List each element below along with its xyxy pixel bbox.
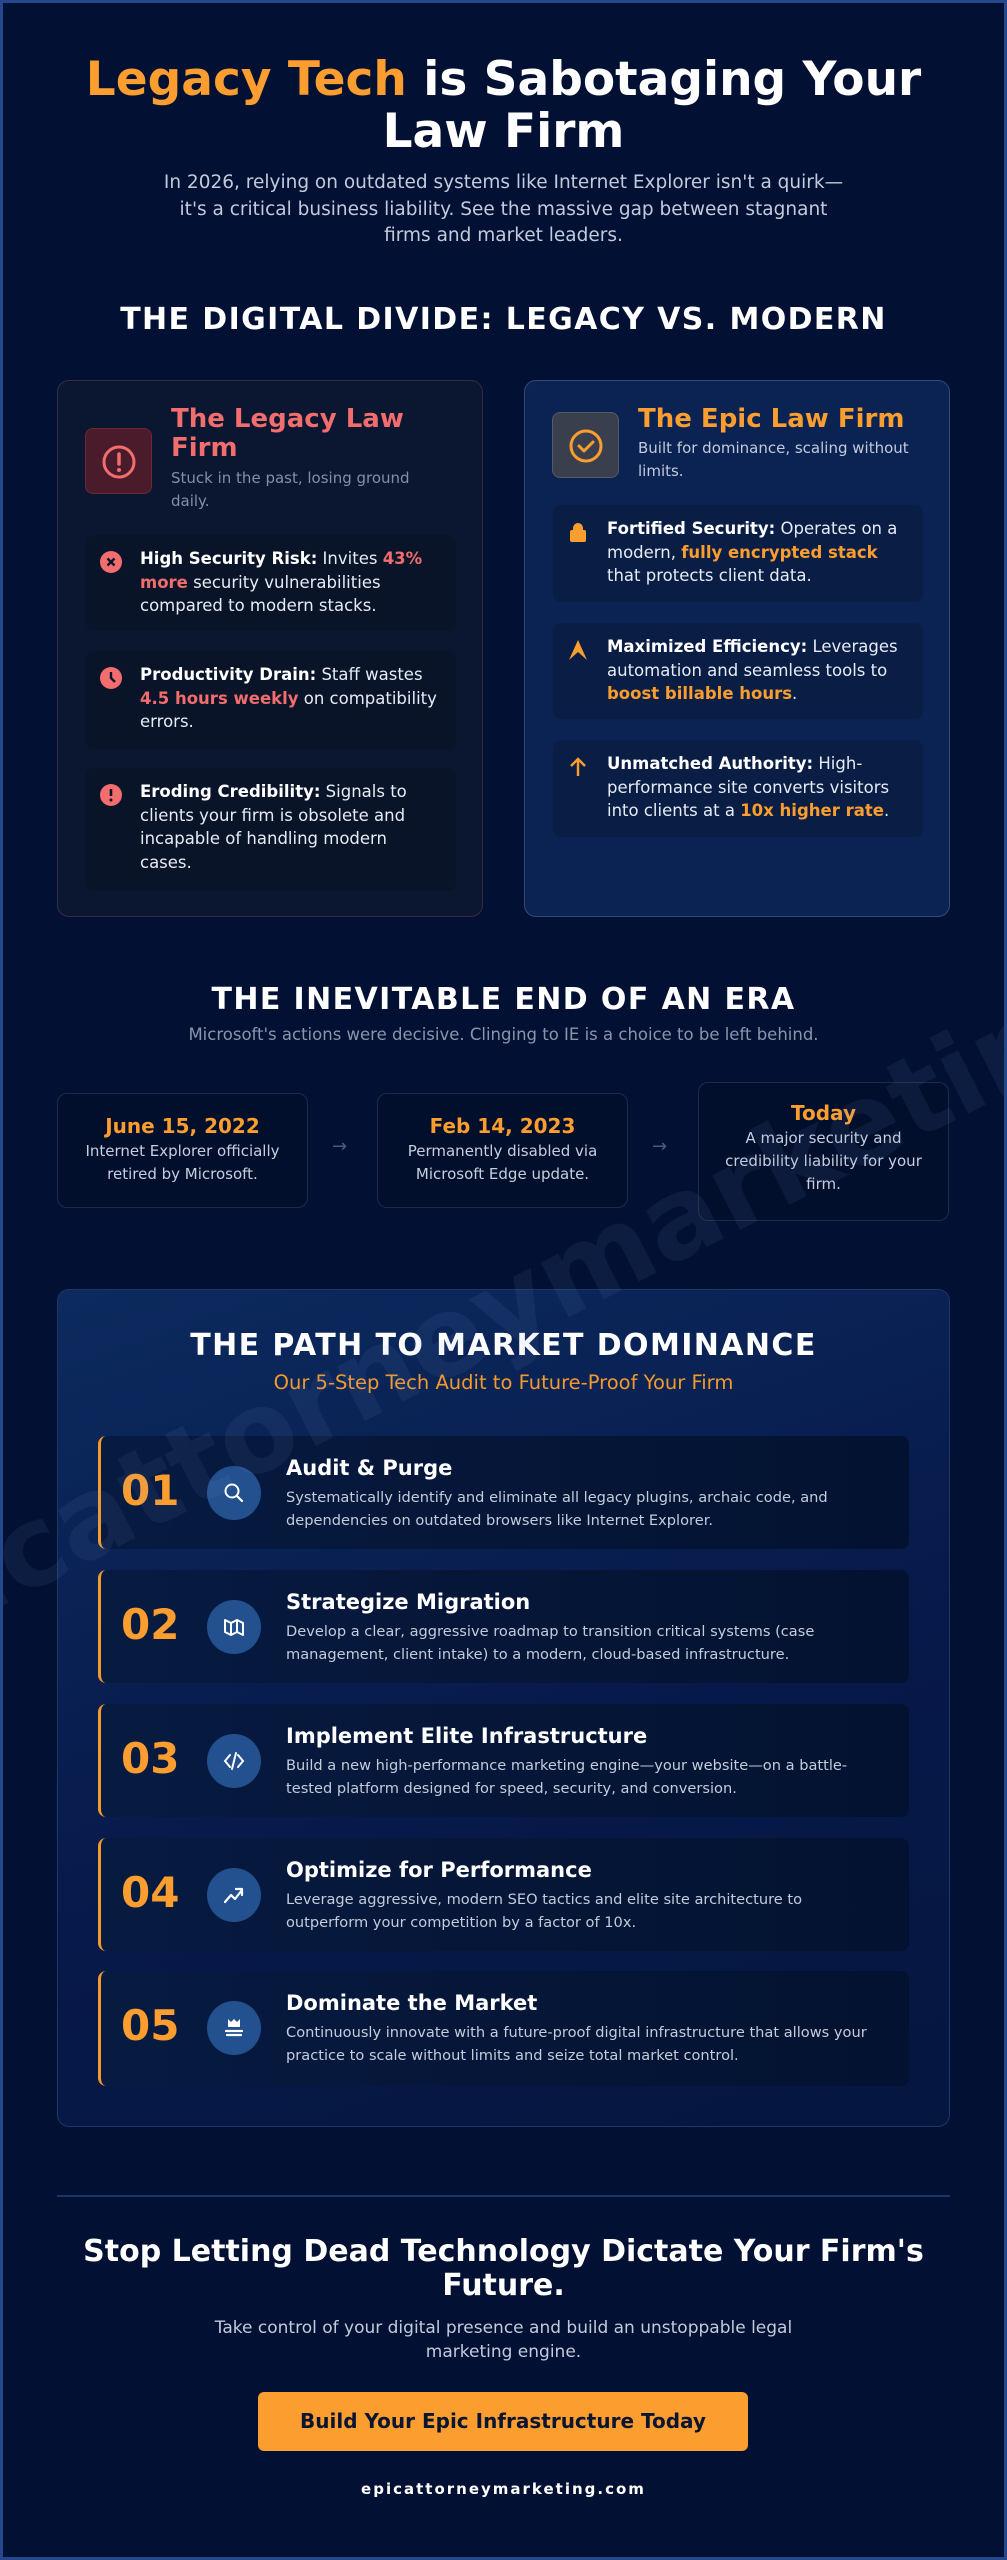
subtitle: epic: Built for dominance, scaling without limits.	[638, 439, 909, 480]
step 04: Optimize for Performance	[286, 1858, 592, 1882]
step 03: Build a new high-performance marketing engine—your website—on a battle-tested platform designed for speed, security, and conversion.	[286, 1757, 847, 1797]
item: productivity drain	[86, 651, 456, 749]
icon: check	[552, 412, 619, 478]
item: unmatched authority: Unmatched Authority: High-performance site converts visitors into clients at a 10x higher rate.	[607, 754, 889, 820]
icon: trend	[207, 1868, 261, 1922]
step 01	[98, 1436, 909, 1549]
icon: alert	[85, 428, 152, 494]
icon: map	[207, 1600, 261, 1654]
step 05: 05	[121, 2001, 179, 2050]
heading: end of an era: THE INEVITABLE END OF AN ERA	[211, 982, 796, 1017]
icon: search	[207, 1466, 261, 1520]
cta button: Build Your Epic Infrastructure Today	[300, 2409, 706, 2433]
subtitle: In 2026, relying on outdated systems like Internet Explorer isn't a quirk—	[164, 172, 843, 193]
step 03: 03	[121, 1734, 179, 1783]
heading: path: THE PATH TO MARKET DOMINANCE	[190, 1328, 817, 1363]
step 02: Strategize Migration	[286, 1590, 530, 1614]
timeline: feb 2023: Permanently disabled via	[408, 1142, 597, 1160]
heading: digital divide: THE DIGITAL DIVIDE: LEGACY VS. MODERN	[120, 302, 887, 337]
step 01: Audit & Purge	[286, 1456, 452, 1480]
item: security risk	[86, 535, 456, 631]
item: fortified security: Fortified Security: Operates on a modern, fully encrypted stack that protects client data.	[607, 519, 897, 585]
step 04: 04	[121, 1868, 179, 1917]
step 05: Continuously innovate with a future-proof digital infrastructure that allows your practice to scale without limits and seize total market control.	[286, 2024, 867, 2064]
step 02	[98, 1570, 909, 1683]
step 04: outperform your competition by a factor of 10x.	[286, 1914, 636, 1931]
item: security risk: High Security Risk: Invites 43% more security vulnerabilities compared to modern stacks.	[140, 549, 422, 615]
item: eroding credibility	[86, 768, 456, 891]
step 05	[98, 1971, 909, 2086]
panel: path to market dominance	[57, 1289, 950, 2127]
panel: legacy law firm	[57, 380, 483, 917]
step 01: Systematically identify and eliminate all legacy plugins, archaic code, and dependencies on outdated browsers like Internet Explorer.	[286, 1489, 828, 1529]
step 03: Implement Elite Infrastructure	[286, 1724, 647, 1748]
timeline: june 2022: June 15, 2022	[105, 1114, 260, 1138]
subtitle: end of era: Microsoft's actions were decisive. Clinging to IE is a choice to be left behind.	[188, 1025, 819, 1044]
cta text: Take control of your digital presence and build an unstoppable legal marketing engine.	[215, 2318, 792, 2362]
title	[86, 52, 922, 159]
footer domain: epicattorneymarketing.com	[361, 2480, 646, 2498]
arrow: →	[332, 1136, 347, 1157]
item: eroding credibility: Eroding Credibility: Signals to clients your firm is obsolete and incapable of handling modern cases.	[140, 782, 407, 872]
subheading: path: Our 5-Step Tech Audit to Future-Proof Your Firm	[274, 1371, 733, 1394]
heading: legacy: The Legacy Law Firm	[171, 404, 404, 463]
subtitle: it's a critical business liability. See the massive gap between stagnant	[180, 198, 827, 220]
timeline: june 2022: retired by Microsoft.	[107, 1165, 258, 1183]
title: Law Firm	[383, 104, 624, 159]
panel: epic law firm	[524, 380, 950, 917]
timeline: june 2022	[57, 1093, 308, 1208]
subtitle: firms and market leaders.	[384, 225, 623, 246]
step 04	[98, 1838, 909, 1951]
icon: crown	[207, 2001, 261, 2055]
step 01: 01	[121, 1466, 179, 1515]
timeline: feb 2023: Feb 14, 2023	[430, 1114, 575, 1138]
timeline: today: Today	[791, 1101, 856, 1125]
step 02: Develop a clear, aggressive roadmap to transition critical systems (case management, client intake) to a modern, cloud-based infrastructure.	[286, 1623, 814, 1663]
subtitle: legacy: Stuck in the past, losing ground daily.	[171, 469, 410, 510]
cta button	[258, 2392, 748, 2451]
subtitle	[164, 172, 843, 246]
arrow: →	[652, 1136, 667, 1157]
item: unmatched authority	[553, 740, 923, 837]
timeline: feb 2023: Microsoft Edge update.	[416, 1165, 589, 1183]
step 02: 02	[121, 1600, 179, 1649]
title: Legacy Tech is Sabotaging Your	[86, 52, 921, 107]
timeline: today	[698, 1082, 949, 1221]
step 03	[98, 1704, 909, 1817]
step 05: Dominate the Market	[286, 1991, 537, 2015]
item: productivity drain: Productivity Drain: Staff wastes 4.5 hours weekly on compatibility errors.	[140, 665, 437, 731]
item: maximized efficiency: Maximized Efficiency: Leverages automation and seamless tools to boost billable hours.	[607, 637, 898, 703]
icon: code	[207, 1734, 261, 1788]
heading: epic: The Epic Law Firm	[638, 404, 904, 434]
timeline: june 2022: Internet Explorer officially	[85, 1142, 280, 1160]
timeline: feb 2023	[377, 1093, 628, 1208]
item: maximized efficiency	[553, 623, 923, 719]
timeline: today: A major security and	[746, 1129, 902, 1147]
timeline: today: credibility liability for your	[725, 1152, 922, 1170]
cta heading: Stop Letting Dead Technology Dictate Your Firm's Future.	[83, 2234, 924, 2303]
timeline: today: firm.	[806, 1175, 841, 1193]
item: fortified security	[553, 505, 923, 602]
step 04: Leverage aggressive, modern SEO tactics and elite site architecture to	[286, 1891, 802, 1908]
